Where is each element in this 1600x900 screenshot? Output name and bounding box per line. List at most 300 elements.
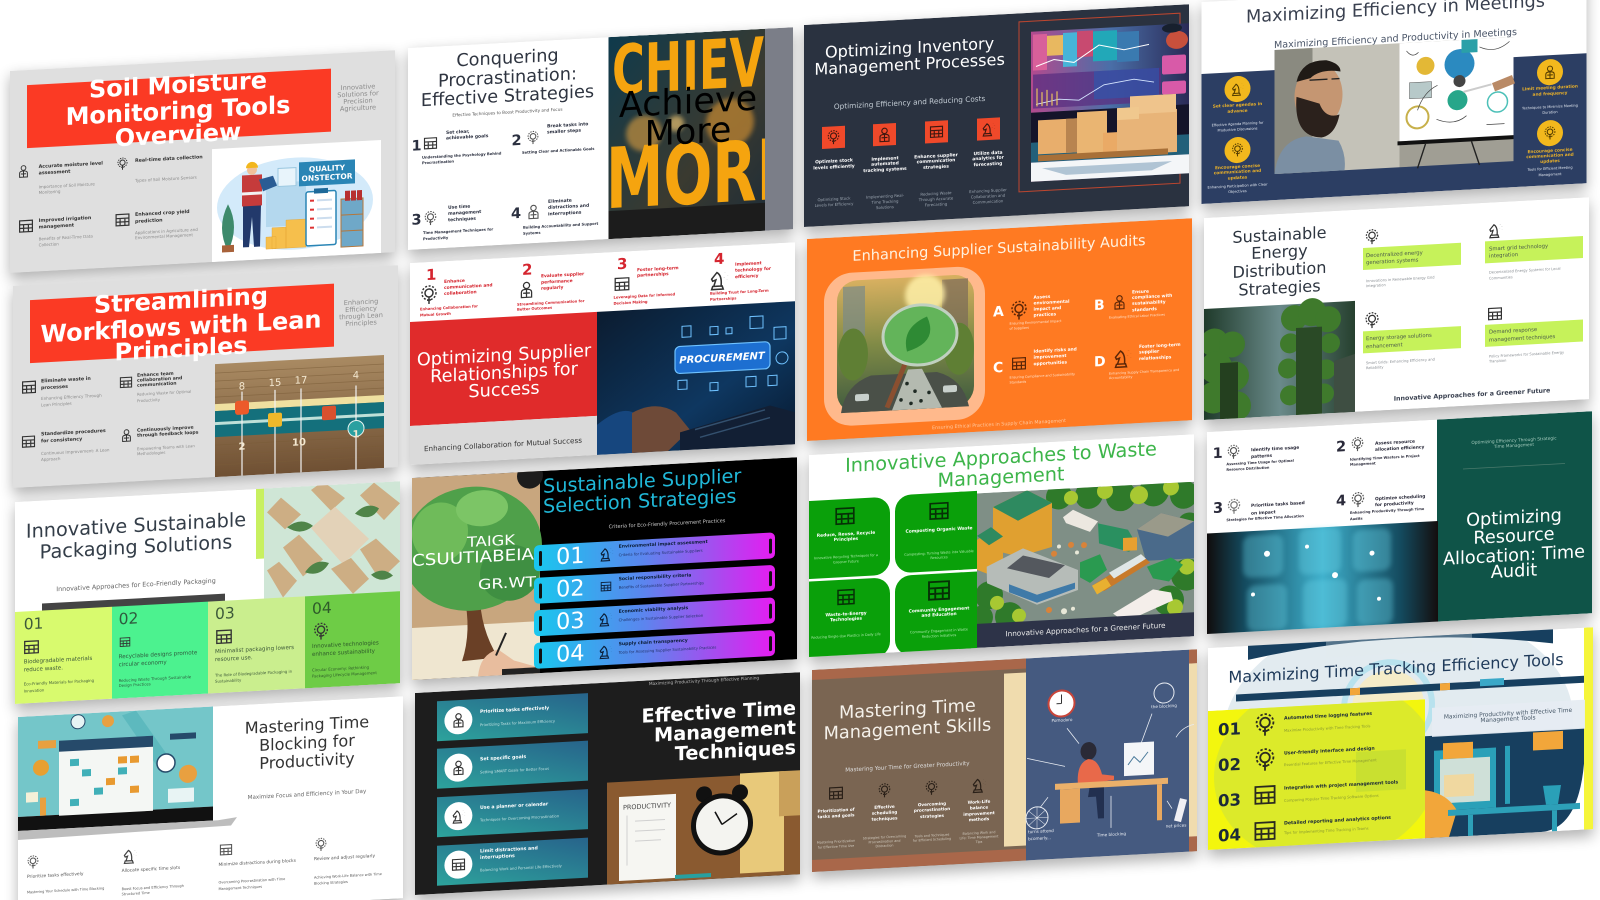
panel: Time Tracking Tools slide (1208, 599, 1593, 870)
side subtitle: through Lean (339, 311, 383, 321)
heading: Effective Time (642, 696, 796, 728)
icon (1255, 822, 1275, 840)
icon (930, 503, 948, 519)
item 1 (27, 852, 104, 895)
photo: timeline on wood: 1 (353, 429, 360, 441)
subtitle: Maximize Focus and Efficiency in Your Day (248, 789, 367, 801)
item 3: Tools and Techniques (914, 833, 950, 839)
card: community: Community Engagement (909, 605, 969, 615)
item 2: Allocate specific time slots (122, 865, 181, 874)
icon (830, 787, 842, 799)
icon (1490, 224, 1502, 238)
item: standardize: Approach (41, 456, 61, 462)
row 03: Economic viability analysis (619, 605, 688, 615)
icon (601, 548, 612, 561)
side panel: Allocation: Time (1443, 542, 1585, 570)
item: concise right: Encourage concise (1527, 147, 1573, 155)
footer band (977, 612, 1194, 648)
row 01: Criteria for Evaluating Sustainable Suppliers (619, 548, 703, 557)
item: limit duration: Limit meeting duration (1522, 83, 1578, 92)
item 3: communication (917, 157, 955, 165)
item A: impact and (1034, 305, 1061, 313)
item: demand: Policy Frameworks for Sustainable Energy (1489, 351, 1565, 359)
card: community: and Education (921, 611, 957, 619)
item 4: Communication (973, 198, 1004, 205)
title panel: Success (468, 379, 540, 402)
item 2: 2 (522, 260, 532, 279)
item B: sustainability (1132, 299, 1166, 307)
card 4: Balancing Work and Personal Life Effectively (480, 864, 563, 872)
item 3: Overcoming Procrastination with Time (218, 877, 285, 885)
heading: Management Skills (824, 715, 991, 744)
icon (828, 130, 839, 144)
card 3: Use a planner or calendar (480, 801, 549, 811)
item 1: communication and (444, 282, 493, 291)
footer band (410, 416, 597, 465)
item C: Ensuring Compliance and Sustainability (1010, 372, 1075, 380)
item 4: Implement (735, 260, 762, 268)
photo: painted tree (402, 462, 543, 681)
item: concise right (1526, 119, 1574, 178)
item 4: Enhancing Productivity Through Time (1350, 507, 1425, 515)
item 4: Audits (1350, 517, 1363, 521)
heading: Innovative Sustainable (26, 508, 246, 543)
item 3: Foster long-term (637, 265, 679, 273)
item 3: 3 (412, 212, 422, 229)
subtitle box (1432, 700, 1585, 737)
card 4: interruptions (480, 853, 515, 861)
heading banner: Soil Moisture (89, 66, 267, 104)
panel: Sustainable Packaging slide (15, 477, 400, 704)
card: reduce reuse recycle: Principles (834, 536, 859, 543)
item: team collaboration: collaboration and (137, 375, 182, 384)
card 3: Techniques for Overcoming Procrastination (479, 814, 560, 823)
item 4: Building Trust for Long-Term (710, 289, 769, 296)
card 03: 03 (215, 604, 235, 623)
item 3: strategies (923, 164, 949, 171)
item 2: Distraction (876, 843, 893, 848)
item: storage (1363, 308, 1461, 370)
item 4: methods (969, 816, 990, 822)
row 02 (1218, 743, 1377, 775)
item 4: efficiency (735, 273, 759, 280)
panel: Supplier Sustainability Audits slide (807, 218, 1192, 441)
item 4: Balancing Work and (963, 830, 995, 836)
panel: Conquering Procrastination slide (408, 22, 796, 250)
subtitle box: Maximizing Productivity with Effective Time (1444, 708, 1573, 721)
heading banner: Overview (115, 118, 241, 152)
card: reduce reuse recycle: Reduce, Reuse, Recycle (817, 530, 875, 539)
card: reduce reuse recycle (794, 497, 890, 580)
heading: Energy (1251, 241, 1308, 263)
card: community: Reduction Initiatives (922, 633, 957, 639)
item 4: Utilize data (973, 150, 1003, 157)
item 3: Decision Making (614, 300, 648, 306)
item: crop yield: prediction (135, 217, 163, 225)
icon (315, 623, 327, 640)
item 1: Mastering Prioritization (817, 839, 855, 845)
item A: A (993, 304, 1004, 321)
row 04: Detailed reporting and analytics options (1284, 815, 1391, 827)
item 1 (420, 263, 493, 317)
item 3: Reducing Waste (920, 190, 952, 197)
side subtitle: Precision (343, 96, 373, 106)
dark bar (42, 594, 225, 612)
illustration: person at desk with clocks: Pomodoro (1052, 717, 1073, 723)
subtitle: Mastering Your Time for Greater Productivity (845, 761, 970, 774)
item D (1094, 342, 1181, 381)
photo: procurement laptop (597, 301, 795, 455)
panel: Soil Moisture slide (10, 50, 395, 273)
item 3: Strategies for Effective Time Allocation (1226, 514, 1304, 522)
item: moisture assessment (20, 160, 103, 196)
item 2: Evaluate supplier (541, 271, 585, 279)
heading: Strategies (1238, 276, 1321, 300)
item: eliminate waste: Lean Principles (41, 401, 72, 407)
item: decentralized: Integration (1366, 283, 1386, 288)
illustration: quality inspector: ONSTECTOR (301, 171, 353, 183)
row 03: 03 (556, 608, 585, 635)
icon: sensor (20, 165, 27, 177)
panel: Sustainable Supplier Selection slide (402, 448, 797, 681)
row 03: 03 (1218, 790, 1241, 810)
item A: environmental (1034, 299, 1070, 307)
side panel: Time Management (1493, 442, 1534, 450)
item 2: Effective (874, 804, 895, 810)
illustration: person at desk with clocks: turns attend (1028, 828, 1054, 834)
item: concise left: communication and (1214, 168, 1261, 176)
item: limit duration (1521, 58, 1578, 116)
panel: Supplier Relationships slide (410, 242, 795, 465)
icon (600, 613, 612, 626)
illustration: laptop calendar (18, 705, 237, 840)
panel: Sustainable Energy slide (1198, 197, 1589, 423)
item D: Enhancing Supply Chain Transparency and (1109, 368, 1179, 376)
item: demand (1485, 303, 1583, 364)
heading: Mastering Time (245, 712, 369, 738)
footer: Ensuring Ethical Practices in Supply Chain Management (932, 418, 1066, 431)
item 2: 2 (512, 133, 522, 149)
item 2: techniques (871, 815, 898, 822)
subtitle: Innovative Approaches for Eco-Friendly Packaging (56, 577, 216, 593)
side subtitle: Agriculture (340, 103, 376, 113)
item 2: performance (541, 278, 573, 286)
icon (836, 508, 854, 524)
item 1: Prioritize tasks effectively (27, 871, 84, 880)
item: irrigation: Benefits of Real-Time Data (39, 234, 93, 241)
item B: standards (1132, 306, 1157, 313)
item: concise right: updates (1540, 158, 1560, 165)
item 3: Overcoming (918, 801, 946, 807)
item: crop yield: Environmental Management (135, 232, 193, 240)
illustration: quality inspector (212, 140, 381, 262)
item 3: Enhance supplier (914, 152, 959, 160)
side subtitle: Principles (345, 318, 377, 328)
icon (528, 131, 538, 144)
heading: Selection Strategies (543, 484, 736, 518)
card 01: 01 (24, 614, 43, 634)
item 4 (960, 778, 999, 845)
icon (452, 859, 464, 870)
item 2: Implementing Real- (866, 193, 905, 200)
card 03: The Role of Biodegradable Packaging in (214, 669, 293, 678)
heading: Mastering Time (839, 696, 976, 724)
item 1: Identify time usage (1251, 445, 1299, 453)
item 3: procrastination (914, 806, 950, 813)
card 04: 04 (312, 599, 332, 618)
item 3 (218, 841, 297, 891)
side subtitle: Solutions for (337, 89, 379, 99)
icon (1366, 312, 1378, 328)
item 3: Management Techniques (218, 885, 262, 891)
row 02: 02 (556, 575, 585, 603)
photo: timeline on wood: 4 (353, 370, 359, 382)
item: team collaboration (120, 370, 191, 404)
title panel: Relationships for (430, 359, 579, 387)
row 03: Integration with project management tools (1284, 779, 1398, 792)
item 1 (1213, 442, 1299, 473)
item: eliminate waste (23, 375, 102, 408)
photo: achieve more (608, 28, 765, 239)
icon (879, 784, 890, 798)
item: limit duration: Techniques to Minimize Meeting (1521, 103, 1578, 111)
item 1 (813, 125, 855, 208)
card 2: Set specific goals (480, 754, 526, 762)
item: moisture assessment: Importance of Soil Moisture (39, 181, 95, 189)
footer: Innovative Approaches for a Greener Future (1394, 387, 1550, 403)
subtitle: Optimizing Efficiency and Reducing Costs (834, 94, 985, 111)
heading: Procrastination: (438, 64, 577, 92)
item 2: Time Tracking (871, 198, 899, 205)
item 1: collaboration (444, 289, 477, 297)
row 04: Tips for Implementing Time Tracking in Teams (1283, 827, 1369, 835)
card 03: resource use. (215, 655, 253, 663)
item 1: Understanding the Psychology Behind (422, 151, 502, 160)
item C: C (993, 360, 1003, 377)
heading: Maximizing Time Tracking Efficiency Tools (1228, 650, 1564, 687)
icon (1233, 84, 1243, 96)
icon (422, 286, 436, 304)
item 2: Solutions (876, 204, 894, 210)
icon (1545, 127, 1555, 140)
item 1: achievable goals (446, 133, 489, 141)
item C: Identify risks and (1034, 346, 1077, 355)
illustration: person at desk with clocks: bcomerly... (1028, 835, 1051, 841)
item 2: allocation efficiency (1375, 444, 1424, 453)
card 02: Reducing Waste Through Sustainable (119, 674, 192, 683)
icon (25, 641, 38, 653)
item 1: for Effective Time Use (818, 844, 854, 850)
item 2 (1336, 434, 1424, 468)
item: feedback: Empowering Teams with Lean (137, 443, 195, 451)
row 02: 02 (1218, 755, 1241, 775)
item: smart grid: integration (1489, 252, 1518, 260)
item A: of Suppliers (1010, 326, 1029, 331)
card 03: Minimalist packaging lowers (215, 645, 294, 655)
item 2: Boost Focus and Efficiency Through (122, 884, 184, 891)
icon (1115, 295, 1124, 309)
item: eliminate waste: Eliminate waste in (41, 376, 91, 384)
row 03 (534, 597, 775, 636)
card: composting (895, 491, 977, 573)
card 01: Innovation (24, 687, 45, 694)
item D: supplier (1139, 348, 1160, 356)
heading: Management (937, 462, 1065, 492)
card 1 (437, 693, 588, 741)
row 02 (534, 565, 775, 604)
item: agendas: advance (1227, 108, 1248, 115)
top subtitle: Maximizing Productivity Through Effective Planning (649, 675, 759, 687)
item: crop yield: Applications in Agriculture and (135, 227, 198, 235)
heading: Management Processes (814, 50, 1005, 79)
photo: data chart and boxes (1031, 23, 1189, 182)
panel: Streamlining Workflows slide (13, 265, 398, 488)
heading banner: Workflows with Lean (41, 305, 321, 349)
photo: painted tree: TAIGK (466, 532, 516, 551)
item: concise left: Objectives (1228, 189, 1247, 194)
icon (454, 761, 463, 775)
card: reduce reuse recycle: Greener Future (833, 559, 859, 565)
item 4: Achieving Work-Life Balance with Time (314, 872, 382, 880)
item 1: patterns (1251, 453, 1273, 460)
row 01: Automated time logging features (1284, 711, 1372, 722)
row 04: 04 (556, 640, 585, 668)
card 02: circular economy (119, 660, 167, 668)
card 2 (437, 741, 588, 789)
item 1: Enhance (444, 278, 465, 285)
item: team collaboration: Enhance team (137, 371, 174, 379)
side panel: Audit (1491, 560, 1537, 583)
subtitle: Maximizing Efficiency and Productivity in Meetings (1274, 27, 1517, 51)
item 2: Streamlining Communication for (517, 299, 585, 307)
item 1 (817, 787, 855, 850)
item: crop yield: Enhanced crop yield (135, 209, 190, 218)
item 4: technology for (735, 266, 772, 274)
heading banner (30, 278, 334, 371)
icon (120, 638, 130, 647)
photo: glowing jars (1207, 521, 1438, 634)
item: eliminate waste: Enhancing Efficiency Through (41, 393, 102, 401)
panel: Time Blocking slide (18, 696, 403, 900)
accent strip (256, 489, 264, 559)
yellow panel (1208, 674, 1438, 870)
item 4: balance (970, 804, 988, 810)
photo: timeline on wood: 17 (295, 375, 307, 387)
photo: procurement laptop: PROCUREMENT (679, 351, 766, 366)
heading: Management (654, 716, 796, 747)
icon (930, 126, 942, 137)
icon: tools (124, 850, 136, 863)
item: storage: Reliability (1366, 365, 1384, 370)
item C: Standards (1010, 380, 1026, 385)
icon (1257, 749, 1273, 771)
side panel: Resource (1473, 525, 1555, 549)
item: standardize (22, 428, 110, 463)
icon (600, 646, 612, 659)
card 04: Circular Economy: Rethinking (312, 664, 370, 673)
heading: Distribution (1233, 258, 1326, 282)
icon: gears (28, 856, 38, 869)
card: community: Community Engagement in Waste (910, 627, 968, 635)
photo: kraft boxes and leaves (264, 477, 400, 601)
item 1: Prioritization of (817, 807, 855, 814)
item 3: Minimize distractions during blocks (218, 858, 297, 868)
panel: Time Management Skills slide (812, 649, 1197, 872)
item B: B (1094, 297, 1105, 314)
item 2 (122, 847, 184, 896)
item 2: Setting Clear and Actionable Goals (522, 147, 595, 155)
icon (123, 430, 130, 441)
item 3 (913, 780, 951, 843)
row 03: Comparing Popular Time Tracking Software Options (1284, 794, 1379, 803)
item: feedback: Methodologies (137, 450, 165, 456)
item: moisture assessment: assessment (39, 169, 71, 176)
item 3: Prioritize tasks based (1251, 500, 1305, 509)
item 4 (710, 247, 772, 302)
item 4: analytics for (972, 155, 1005, 162)
item: agendas (1212, 75, 1264, 133)
icon (1546, 66, 1554, 79)
card 1: Prioritizing Tasks for Maximum Efficiency (480, 719, 556, 727)
item 2: Assess resource (1375, 439, 1415, 447)
card 4: Limit distractions and (480, 845, 538, 854)
icon: grid (20, 220, 32, 232)
photo: alarm clock and notepad: PRODUCTIVITY (623, 801, 671, 812)
heading: Optimizing Inventory (825, 34, 995, 62)
illustration: person at desk with clocks: net prices (1166, 822, 1186, 829)
item 3: on impact (1251, 509, 1276, 517)
item: smart grid: Smart grid technology (1489, 243, 1548, 253)
item 1: Procrastination (422, 159, 454, 165)
icon (615, 278, 629, 290)
row 01 (1218, 708, 1372, 739)
item D: D (1094, 354, 1106, 370)
item: decentralized: generation systems (1366, 257, 1419, 266)
title panel (410, 312, 597, 426)
item D: relationships (1139, 354, 1172, 362)
item 3: Use time (448, 204, 470, 211)
item D: Accountability (1109, 375, 1132, 380)
item 4: for productivity (1375, 500, 1414, 508)
image: magnifying glass on leaf (824, 265, 985, 427)
item: agendas: Set clear agendas in (1213, 101, 1262, 110)
item 2: smaller steps (547, 128, 581, 135)
item 2 (863, 122, 907, 211)
icon (1228, 499, 1240, 514)
icon (1013, 358, 1025, 369)
card 04: Innovative technologies (312, 640, 379, 650)
side panel (1437, 411, 1592, 622)
photo: timeline on wood (215, 355, 384, 477)
card 3 (437, 789, 588, 837)
row 03: Challenges in Sustainable Supplier Selection (619, 613, 704, 622)
item 1: tasks and goals (818, 812, 855, 819)
item 1: 1 (1213, 446, 1223, 462)
item 3: Time Management Techniques for (423, 227, 493, 235)
item A: Ensuring Environmental Impact (1010, 319, 1062, 326)
item: limit duration: Duration (1542, 110, 1558, 115)
item 3: for Efficient Scheduling (913, 837, 951, 843)
item: irrigation (20, 215, 93, 248)
item B: compliance with (1132, 293, 1172, 301)
item: smart grid: Communities (1489, 275, 1513, 281)
title panel: Optimizing Supplier (417, 341, 592, 371)
item 1: Set clear, (446, 129, 470, 136)
icon (880, 128, 889, 142)
photo: timeline on wood: 10 (292, 437, 306, 449)
row 04 (1218, 815, 1391, 845)
item 4: 4 (1336, 493, 1346, 510)
